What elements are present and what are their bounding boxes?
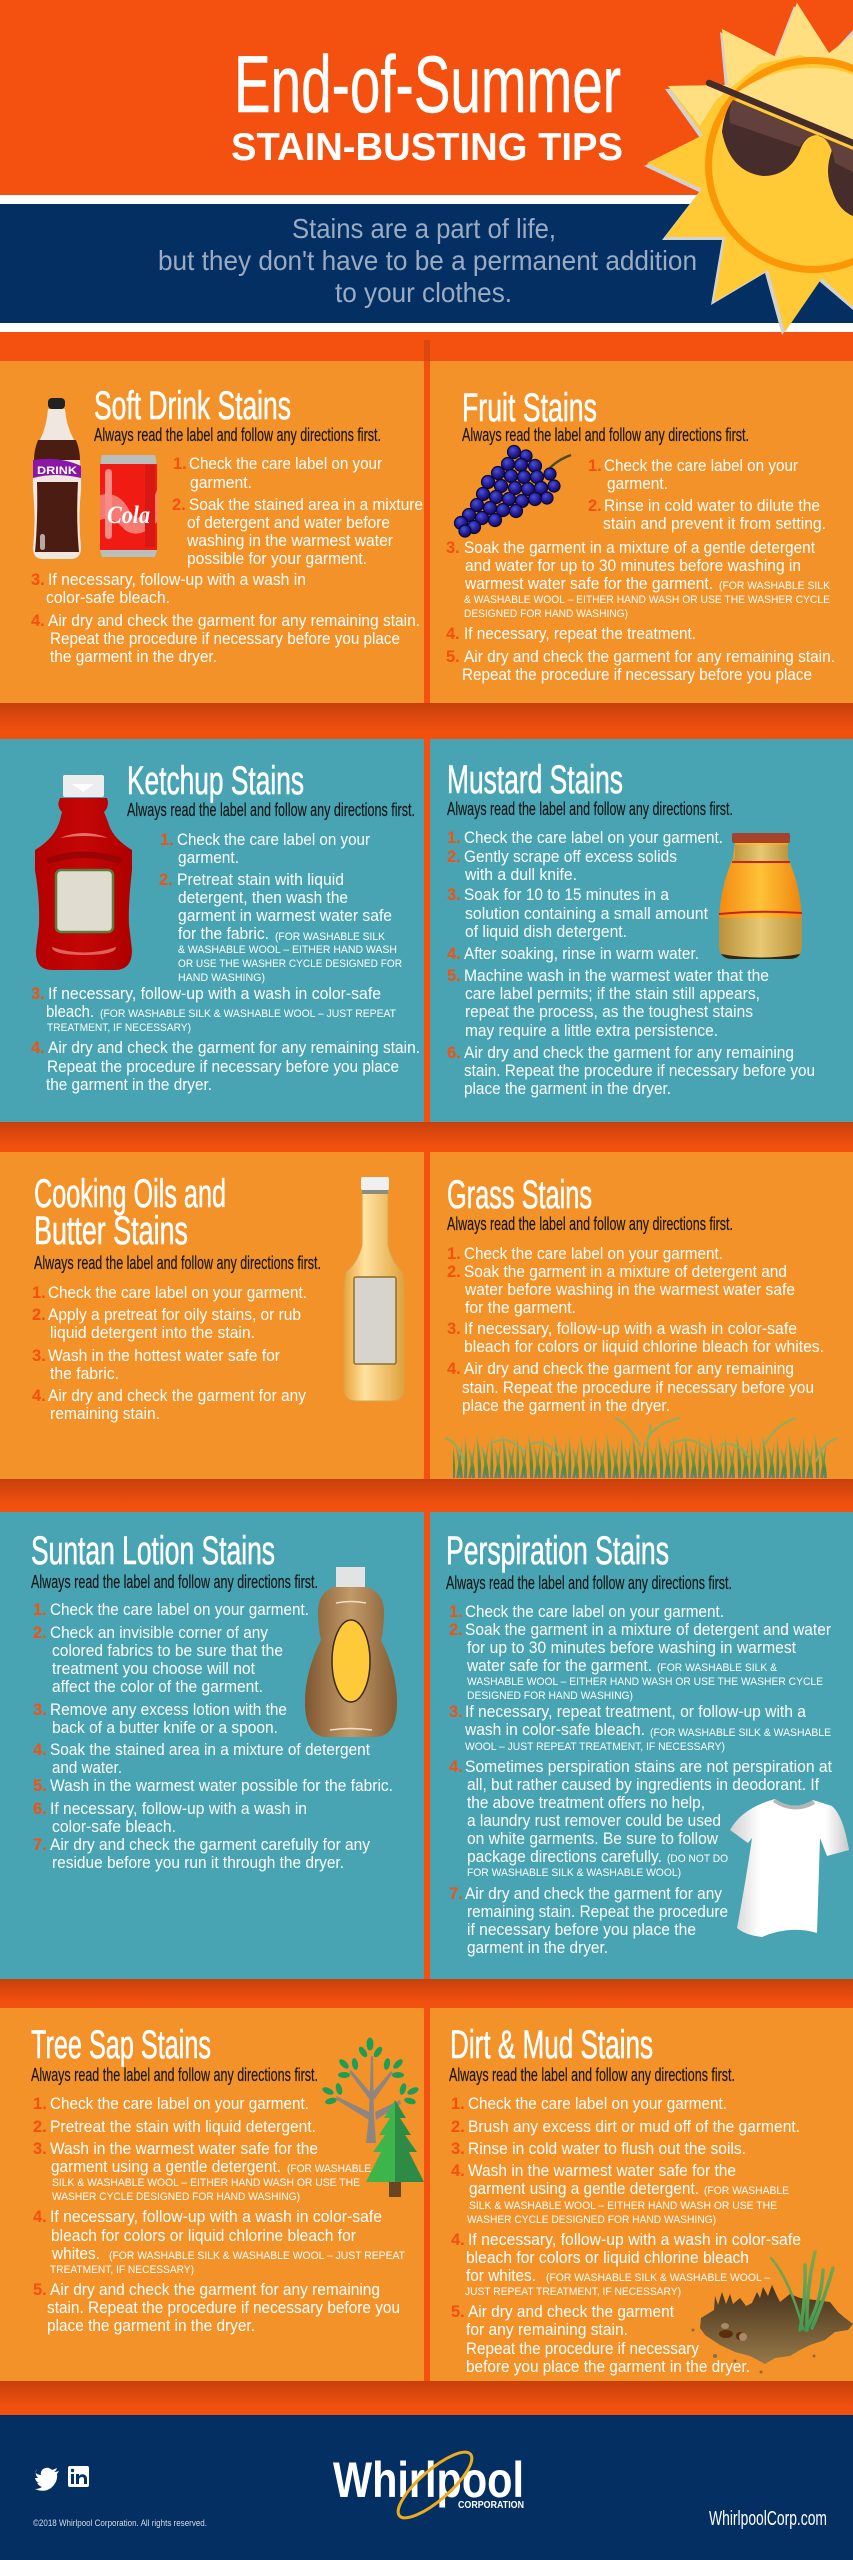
- steps: WASHABLE WOOL – EITHER HAND WASH OR USE THE WASHER CYCLE: [467, 1676, 823, 1688]
- icon: grapes: [454, 446, 571, 537]
- steps: repeat the process, as the toughest stains: [465, 1002, 753, 1021]
- steps: 1.: [588, 457, 602, 475]
- steps: 1.: [451, 2095, 465, 2113]
- steps: Apply a pretreat for oily stains, or rub: [48, 1305, 301, 1324]
- steps: Air dry and check the garment for any: [48, 1386, 306, 1405]
- steps: washing in the warmest water: [186, 531, 393, 550]
- steps: 5.: [33, 1777, 47, 1795]
- steps: If necessary, follow-up with a wash in color-safe: [468, 2230, 801, 2249]
- steps: 4.: [33, 1741, 47, 1759]
- steps: Rinse in cold water to flush out the soils.: [468, 2139, 746, 2158]
- steps: Soak the garment in a mixture of detergent and: [464, 1262, 787, 1281]
- steps: 2.: [33, 1624, 47, 1642]
- steps: [447, 828, 815, 1098]
- steps: 3.: [33, 2140, 47, 2158]
- footer: [0, 2415, 853, 2560]
- steps: 4.: [31, 612, 45, 630]
- subheading: Always read the label and follow any directions first.: [34, 1253, 321, 1273]
- steps: 2.: [159, 871, 173, 889]
- steps: for whites.: [466, 2266, 536, 2285]
- icon: dirt mound with grass: [692, 2252, 853, 2374]
- steps: SILK & WASHABLE WOOL – EITHER HAND WASH OR USE THE: [52, 2177, 360, 2189]
- steps: Air dry and check the garment for any remaining: [464, 1043, 794, 1062]
- heading: Cooking Oils and: [34, 1172, 226, 1216]
- steps: wash in color-safe bleach.: [464, 1720, 645, 1739]
- steps: 3.: [447, 886, 461, 904]
- steps: garment using a gentle detergent.: [51, 2157, 281, 2176]
- icon: linkedin: [68, 2466, 89, 2487]
- steps: Brush any excess dirt or mud off of the garment.: [468, 2117, 800, 2136]
- subheading: Always read the label and follow any directions first.: [449, 2065, 735, 2085]
- steps: If necessary, repeat treatment, or follow-up with a: [465, 1702, 806, 1721]
- icon: soda bottle and can: DRINK: [37, 465, 77, 477]
- steps: before you place the garment in the dryer.: [466, 2357, 750, 2376]
- icon: t-shirt: [730, 1799, 849, 1937]
- steps: 4.: [32, 1387, 46, 1405]
- steps: Air dry and check the garment for any remaining stain.: [48, 1038, 420, 1057]
- steps: (FOR WASHABLE SILK & WASHABLE WOOL – JUST REPEAT: [109, 2250, 405, 2262]
- steps: JUST REPEAT TREATMENT, IF NECESSARY): [465, 2286, 681, 2298]
- steps: colored fabrics to be sure that the: [52, 1641, 283, 1660]
- steps: [31, 454, 423, 666]
- steps: (FOR WASHABLE SILK & WASHABLE: [650, 1727, 831, 1739]
- subheading: Always read the label and follow any directions first.: [446, 1573, 732, 1593]
- steps: for up to 30 minutes before washing in warmest: [467, 1638, 796, 1657]
- icon: trees: [321, 2038, 424, 2197]
- heading: Soft Drink Stains: [94, 384, 291, 428]
- steps: [446, 456, 835, 684]
- steps: 2.: [32, 1306, 46, 1324]
- heading: Perspiration Stains: [446, 1529, 669, 1573]
- steps: Wash in the warmest water possible for the fabric.: [50, 1776, 393, 1795]
- steps: Wash in the warmest water safe for the: [468, 2161, 736, 2180]
- title: End-of-Summer: [234, 40, 621, 130]
- steps: 2.: [33, 2118, 47, 2136]
- panel: tree sap stains: [0, 2008, 424, 2381]
- steps: stain. Repeat the procedure if necessary before you: [464, 1061, 815, 1080]
- steps: 1.: [160, 831, 174, 849]
- steps: 2.: [451, 2118, 465, 2136]
- steps: [32, 1283, 307, 1423]
- steps: Check the care label on your garment.: [50, 1600, 309, 1619]
- steps: water before washing in the warmest water safe: [464, 1280, 795, 1299]
- steps: remaining stain.: [50, 1404, 160, 1423]
- steps: (DO NOT DO: [667, 1853, 728, 1865]
- steps: 4.: [451, 2231, 465, 2249]
- heading: Dirt & Mud Stains: [450, 2023, 653, 2067]
- steps: Pretreat stain with liquid: [177, 870, 344, 889]
- steps: [447, 1244, 824, 1415]
- steps: Check an invisible corner of any: [50, 1623, 268, 1642]
- steps: If necessary, follow-up with a wash in color-safe: [48, 984, 381, 1003]
- steps: 3.: [449, 1703, 463, 1721]
- icon: soda bottle and can: [33, 398, 157, 559]
- panel: fruit stains: [430, 361, 853, 703]
- steps: Air dry and check the garment for any remaining stain.: [48, 611, 420, 630]
- header band: [0, 3, 853, 335]
- heading: Mustard Stains: [447, 758, 623, 802]
- steps: garment using a gentle detergent.: [469, 2179, 699, 2198]
- steps: FOR WASHABLE SILK & WASHABLE WOOL): [467, 1867, 681, 1879]
- steps: Air dry and check the garment for any remaining: [464, 1359, 794, 1378]
- panel: suntan lotion stains: [0, 1512, 424, 1979]
- icon: twitter: [35, 2468, 59, 2491]
- steps: Machine wash in the warmest water that the: [464, 966, 769, 985]
- steps: garment in the dryer.: [467, 1938, 608, 1957]
- steps: stain. Repeat the procedure if necessary before you: [47, 2298, 400, 2317]
- steps: for the garment.: [465, 1298, 576, 1317]
- steps: OR USE THE WASHER CYCLE DESIGNED FOR: [178, 958, 402, 970]
- intro text: [158, 213, 697, 308]
- steps: residue before you run it through the dryer.: [52, 1853, 344, 1872]
- steps: Gently scrape off excess solids: [464, 847, 677, 866]
- panel: cooking oils and butter stains: [0, 1152, 424, 1479]
- steps: garment.: [178, 848, 239, 867]
- steps: bleach for colors or liquid chlorine bleach for whites.: [464, 1337, 824, 1356]
- steps: TREATMENT, IF NECESSARY): [50, 2264, 194, 2276]
- steps: 1.: [33, 2095, 47, 2113]
- subheading: Always read the label and follow any directions first.: [447, 799, 733, 819]
- steps: If necessary, follow-up with a wash in: [48, 570, 306, 589]
- steps: 4.: [447, 1360, 461, 1378]
- steps: (FOR WASHABLE SILK & WASHABLE WOOL –: [546, 2272, 771, 2284]
- steps: color-safe bleach.: [46, 588, 170, 607]
- steps: 3.: [31, 571, 45, 589]
- steps: care label permits; if the stain still appears,: [465, 984, 760, 1003]
- steps: 4.: [447, 945, 461, 963]
- steps: 2.: [447, 848, 461, 866]
- steps: Repeat the procedure if necessary before you place: [462, 665, 812, 684]
- steps: Soak the garment in a mixture of a gentle detergent: [464, 538, 815, 557]
- steps: if necessary before you place the: [467, 1920, 696, 1939]
- steps: 5.: [451, 2303, 465, 2321]
- steps: 1.: [173, 455, 187, 473]
- steps: the garment in the dryer.: [50, 647, 217, 666]
- steps: Check the care label on your garment.: [48, 1283, 307, 1302]
- steps: Air dry and check the garment for any remaining: [50, 2280, 380, 2299]
- steps: DESIGNED FOR HAND WASHING): [464, 608, 628, 620]
- steps: warmest water safe for the garment.: [464, 574, 713, 593]
- steps: 4.: [449, 1758, 463, 1776]
- steps: 3.: [451, 2140, 465, 2158]
- steps: 1.: [447, 829, 461, 847]
- subheading: Always read the label and follow any directions first.: [31, 1572, 318, 1592]
- steps: 2.: [449, 1621, 463, 1639]
- steps: [33, 2094, 405, 2335]
- steps: for the fabric.: [178, 924, 269, 943]
- steps: with a dull knife.: [464, 865, 577, 884]
- steps: garment in warmest water safe: [178, 906, 392, 925]
- panel: soft drink stains: [0, 361, 424, 703]
- steps: [451, 2094, 801, 2376]
- title: STAIN-BUSTING TIPS: [231, 126, 623, 169]
- subheading: Always read the label and follow any directions first.: [31, 2065, 318, 2085]
- steps: 5.: [447, 967, 461, 985]
- steps: 4.: [451, 2162, 465, 2180]
- icon: lotion bottle: [305, 1567, 397, 1737]
- steps: 3.: [31, 985, 45, 1003]
- heading: Fruit Stains: [462, 386, 597, 430]
- steps: garment.: [190, 473, 252, 492]
- steps: on white garments. Be sure to follow: [467, 1829, 719, 1848]
- steps: HAND WASHING): [178, 972, 265, 984]
- steps: WASHER CYCLE DESIGNED FOR HAND WASHING): [52, 2191, 300, 2203]
- steps: place the garment in the dryer.: [464, 1079, 671, 1098]
- steps: Check the care label on your garment.: [50, 2094, 309, 2113]
- steps: 3.: [446, 539, 460, 557]
- steps: Soak the stained area in a mixture of detergent: [50, 1740, 370, 1759]
- steps: After soaking, rinse in warm water.: [464, 944, 699, 963]
- steps: 1.: [447, 1245, 461, 1263]
- steps: Air dry and check the garment for any: [465, 1884, 722, 1903]
- steps: of detergent and water before: [187, 513, 390, 532]
- steps: the fabric.: [50, 1364, 119, 1383]
- steps: DESIGNED FOR HAND WASHING): [467, 1690, 633, 1702]
- steps: 3.: [32, 1347, 46, 1365]
- steps: (FOR WASHABLE: [704, 2185, 789, 2197]
- steps: and water for up to 30 minutes before washing in: [465, 556, 801, 575]
- steps: & WASHABLE WOOL – EITHER HAND WASH OR USE THE WASHER CYCLE: [464, 594, 830, 606]
- subheading: Always read the label and follow any directions first.: [447, 1214, 733, 1234]
- subheading: Always read the label and follow any directions first.: [127, 800, 415, 820]
- steps: 1.: [449, 1603, 463, 1621]
- steps: 3.: [447, 1320, 461, 1338]
- steps: Wash in the hottest water safe for: [48, 1346, 280, 1365]
- steps: and water.: [52, 1758, 122, 1777]
- icon: oil bottle: [344, 1177, 404, 1401]
- steps: Repeat the procedure if necessary: [466, 2339, 699, 2358]
- logo: whirlpool corporation: Whirlpool: [333, 2452, 524, 2508]
- steps: (FOR WASHABLE SILK: [275, 931, 386, 943]
- steps: Pretreat the stain with liquid detergent.: [50, 2117, 316, 2136]
- steps: (FOR WASHABLE SILK: [719, 580, 831, 592]
- icon: sun with sunglasses: [644, 3, 853, 335]
- heading: [34, 1172, 226, 1253]
- steps: bleach for colors or liquid chlorine bleach: [466, 2248, 749, 2267]
- steps: stain and prevent it from setting.: [603, 514, 826, 533]
- steps: Check the care label on your: [604, 456, 798, 475]
- steps: & WASHABLE WOOL – EITHER HAND WASH: [178, 944, 397, 956]
- steps: If necessary, follow-up with a wash in color-safe: [50, 2207, 382, 2226]
- logo: whirlpool corporation: [333, 2443, 524, 2527]
- steps: for any remaining stain.: [466, 2320, 628, 2339]
- steps: garment.: [607, 474, 668, 493]
- steps: Check the care label on your garment.: [464, 828, 723, 847]
- panel: ketchup stains: [0, 739, 424, 1122]
- steps: Check the care label on your garment.: [465, 1602, 724, 1621]
- steps: (FOR WASHABLE: [287, 2163, 371, 2175]
- steps: place the garment in the dryer.: [462, 1396, 670, 1415]
- steps: [31, 830, 420, 1094]
- steps: treatment you choose will not: [52, 1659, 255, 1678]
- steps: Soak the stained area in a mixture: [189, 495, 423, 514]
- logo: whirlpool corporation: CORPORATION: [458, 2500, 524, 2511]
- steps: Check the care label on your: [189, 454, 382, 473]
- steps: Check the care label on your garment.: [468, 2094, 727, 2113]
- panel: perspiration stains: [430, 1512, 853, 1979]
- copyright: ©2018 Whirlpool Corporation. All rights reserved.: [33, 2518, 207, 2528]
- steps: Check the care label on your: [177, 830, 370, 849]
- steps: Rinse in cold water to dilute the: [604, 496, 820, 515]
- steps: place the garment in the dryer.: [47, 2316, 255, 2335]
- steps: remaining stain. Repeat the procedure: [467, 1902, 728, 1921]
- heading: Tree Sap Stains: [31, 2023, 211, 2067]
- intro text: Stains are a part of life,: [292, 213, 556, 244]
- steps: 7.: [449, 1885, 463, 1903]
- steps: Soak for 10 to 15 minutes in a: [464, 885, 669, 904]
- steps: 3.: [33, 1701, 47, 1719]
- steps: the garment in the dryer.: [46, 1075, 212, 1094]
- steps: stain. Repeat the procedure if necessary before you: [462, 1378, 814, 1397]
- steps: Wash in the warmest water safe for the: [50, 2139, 318, 2158]
- steps: (FOR WASHABLE SILK &: [657, 1662, 778, 1674]
- steps: Air dry and check the garment: [468, 2302, 674, 2321]
- title: [231, 40, 623, 169]
- steps: Sometimes perspiration stains are not perspiration at: [465, 1757, 832, 1776]
- steps: Remove any excess lotion with the: [50, 1700, 287, 1719]
- steps: If necessary, follow-up with a wash in: [50, 1799, 307, 1818]
- intro text: to your clothes.: [335, 277, 512, 308]
- steps: package directions carefully.: [467, 1847, 662, 1866]
- steps: 4.: [33, 2208, 47, 2226]
- steps: 4.: [31, 1039, 45, 1057]
- steps: 5.: [33, 2281, 47, 2299]
- steps: If necessary, follow-up with a wash in color-safe: [464, 1319, 797, 1338]
- panel: mustard stains: [430, 739, 853, 1122]
- steps: 2.: [447, 1263, 461, 1281]
- steps: a laundry rust remover could be used: [467, 1811, 721, 1830]
- steps: 6.: [33, 1800, 47, 1818]
- steps: color-safe bleach.: [52, 1817, 176, 1836]
- steps: 6.: [447, 1044, 461, 1062]
- steps: may require a little extra persistence.: [465, 1021, 718, 1040]
- steps: 1.: [32, 1284, 46, 1302]
- steps: [449, 1602, 832, 1957]
- steps: whites.: [51, 2244, 100, 2263]
- steps: liquid detergent into the stain.: [50, 1323, 255, 1342]
- steps: If necessary, repeat the treatment.: [464, 624, 696, 643]
- steps: affect the color of the garment.: [52, 1677, 263, 1696]
- heading: Suntan Lotion Stains: [31, 1529, 275, 1573]
- steps: 4.: [446, 625, 460, 643]
- steps: bleach.: [46, 1002, 94, 1021]
- steps: Check the care label on your garment.: [464, 1244, 723, 1263]
- panel: dirt and mud stains: [430, 2008, 853, 2381]
- heading: Ketchup Stains: [127, 759, 304, 803]
- steps: TREATMENT, IF NECESSARY): [47, 1022, 191, 1034]
- steps: 2.: [172, 496, 186, 514]
- steps: 2.: [588, 497, 602, 515]
- steps: 1.: [33, 1601, 47, 1619]
- subheading: Always read the label and follow any directions first.: [94, 425, 381, 445]
- steps: all, but rather caused by ingredients in deodorant. If: [467, 1775, 819, 1794]
- steps: 5.: [446, 648, 460, 666]
- icon: ketchup bottle: [35, 775, 132, 970]
- heading: Grass Stains: [447, 1173, 592, 1217]
- intro text: but they don't have to be a permanent addition: [158, 245, 697, 276]
- steps: water safe for the garment.: [466, 1656, 652, 1675]
- steps: back of a butter knife or a spoon.: [52, 1718, 278, 1737]
- heading: Butter Stains: [34, 1209, 188, 1253]
- icon: grass: [445, 1418, 838, 1478]
- steps: WASHER CYCLE DESIGNED FOR HAND WASHING): [467, 2214, 716, 2226]
- steps: bleach for colors or liquid chlorine bleach for: [51, 2226, 356, 2245]
- steps: Repeat the procedure if necessary before you place: [47, 1057, 399, 1076]
- steps: 7.: [33, 1836, 47, 1854]
- steps: detergent, then wash the: [178, 888, 348, 907]
- steps: Air dry and check the garment carefully for any: [50, 1835, 370, 1854]
- steps: possible for your garment.: [187, 549, 367, 568]
- steps: the above treatment offers no help,: [467, 1793, 705, 1812]
- steps: [33, 1600, 393, 1872]
- steps: SILK & WASHABLE WOOL – EITHER HAND WASH OR USE THE: [469, 2200, 777, 2212]
- steps: (FOR WASHABLE SILK & WASHABLE WOOL – JUST REPEAT: [100, 1008, 396, 1020]
- steps: Repeat the procedure if necessary before you place: [50, 629, 400, 648]
- panel: grass stains: [430, 1152, 853, 1479]
- icon: soda bottle and can: Cola: [107, 502, 150, 529]
- steps: of liquid dish detergent.: [465, 922, 627, 941]
- steps: solution containing a small amount: [465, 904, 708, 923]
- icon: mustard jar: [719, 833, 802, 959]
- steps: WOOL – JUST REPEAT TREATMENT, IF NECESSARY): [465, 1741, 725, 1753]
